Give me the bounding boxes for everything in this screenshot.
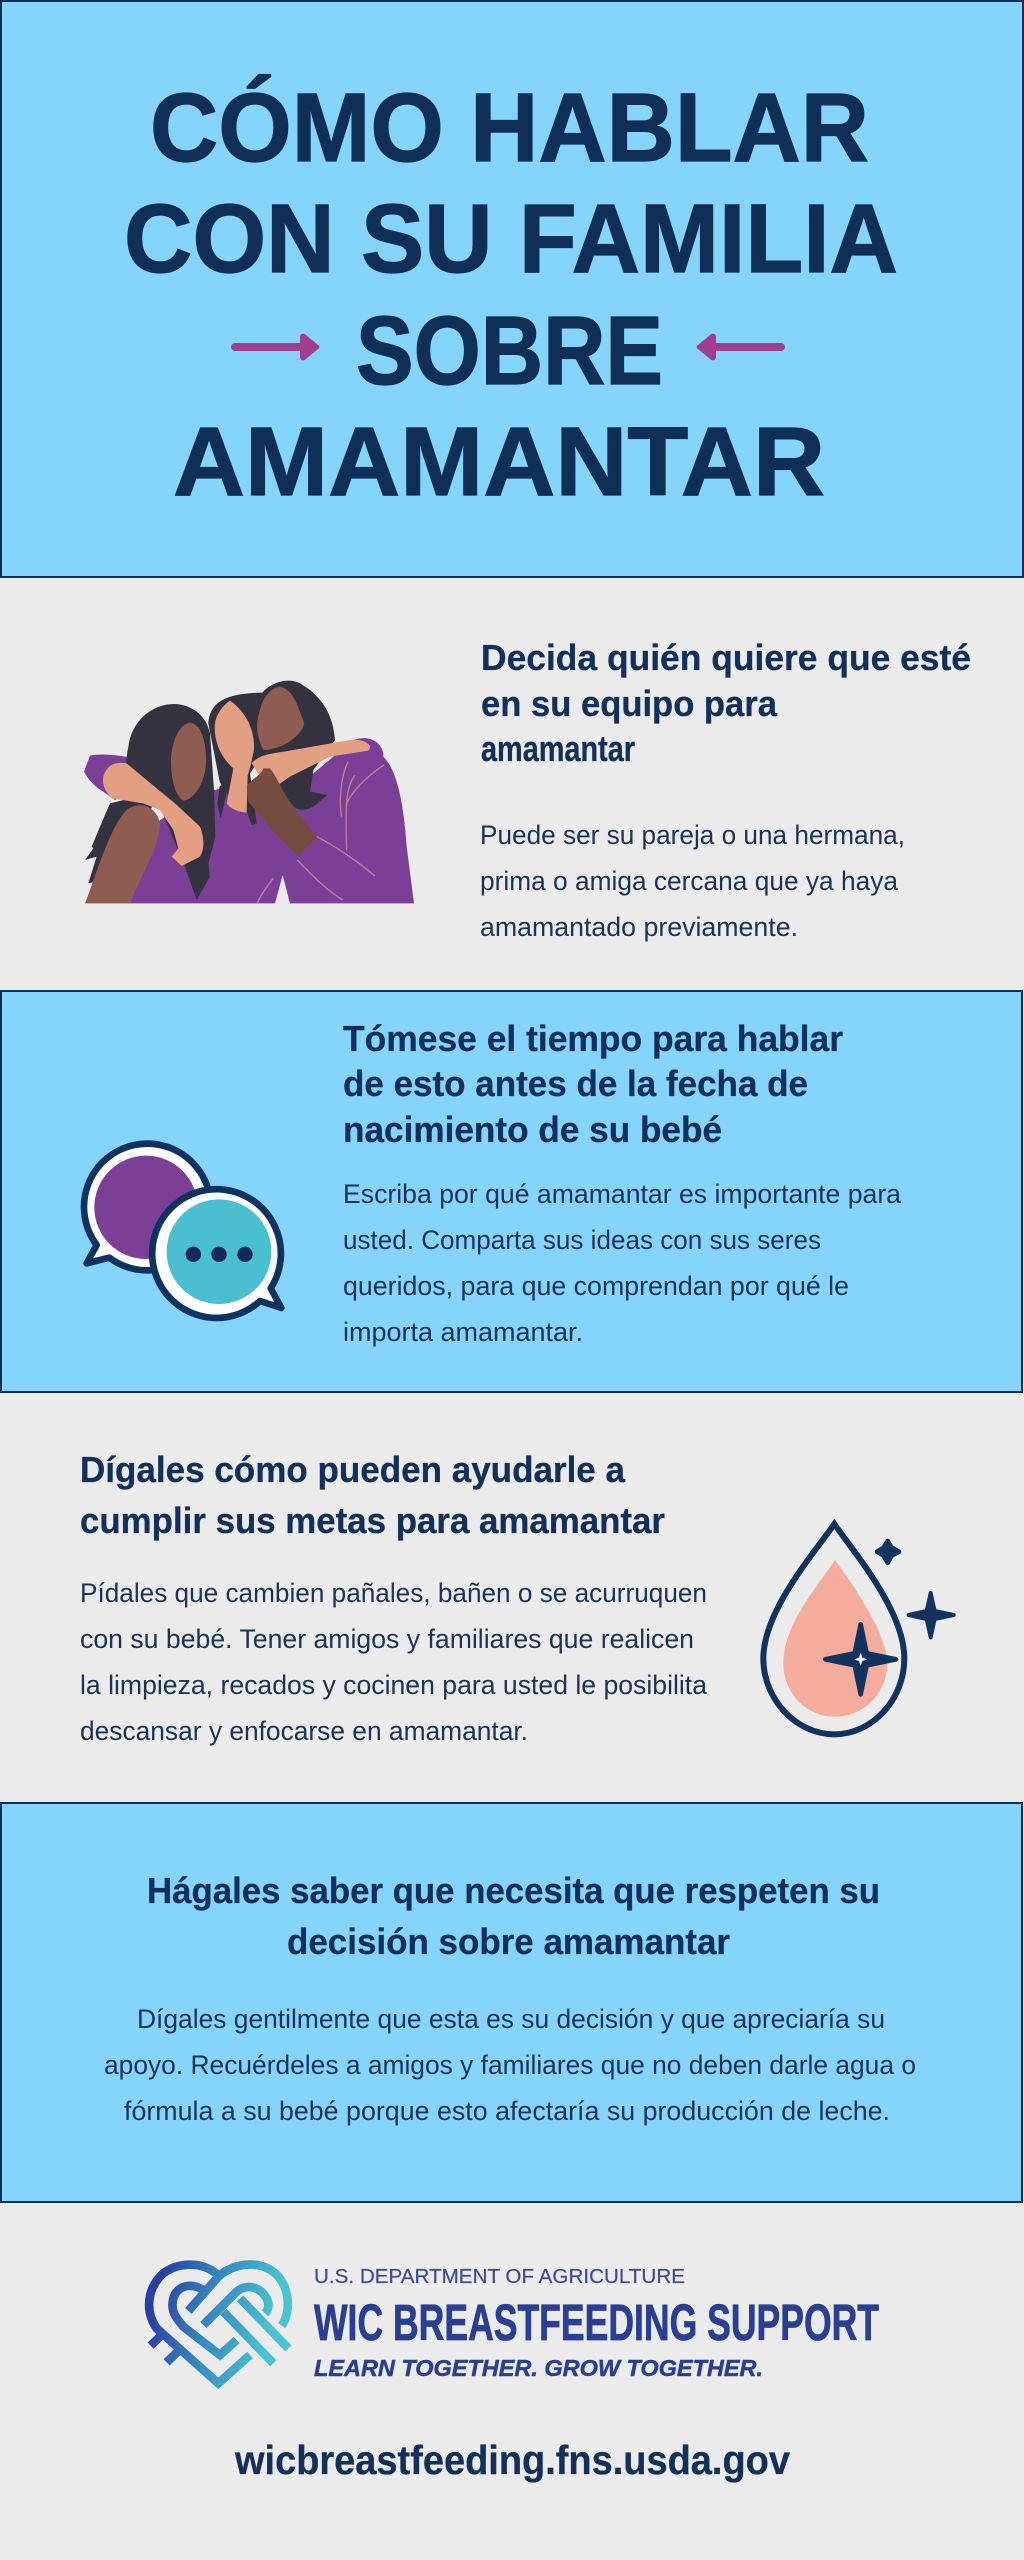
heading: en su equipo para — [481, 683, 778, 724]
panel: take the time to talk — [1, 991, 1022, 1392]
title: SOBRE — [356, 296, 663, 405]
panel: title banner — [1, 1, 1023, 577]
heading: de esto antes de la fecha de — [343, 1063, 808, 1104]
icon: WIC heart logo — [149, 2265, 288, 2383]
illustration: three women hugging — [84, 681, 414, 903]
icon: speech bubbles — [84, 1144, 281, 1318]
text block: Dígales gentilmente que esta es su decisión y que apreciaría su — [137, 2004, 885, 2034]
logo text: tagline: LEARN TOGETHER. GROW TOGETHER. — [314, 2355, 763, 2381]
panel: tell them how to help — [80, 1449, 954, 1746]
heading: Tómese el tiempo para hablar — [343, 1018, 843, 1059]
heading: decisión sobre amamantar — [287, 1921, 730, 1962]
logo text: department: U.S. DEPARTMENT OF AGRICULTURE — [314, 2266, 685, 2288]
heading — [481, 637, 971, 769]
heading — [147, 1870, 880, 1962]
text block — [80, 1578, 708, 1746]
text block: Puede ser su pareja o una hermana, — [480, 820, 905, 850]
text block: Pídales que cambien pañales, bañen o se acurruquen — [80, 1578, 707, 1608]
panel: footer — [149, 2265, 879, 2483]
text block: prima o amiga cercana que ya haya — [480, 866, 899, 896]
title: CÓMO HABLAR — [150, 73, 869, 182]
text block — [480, 820, 905, 942]
text block: fórmula a su bebé porque esto afectaría su producción de leche. — [124, 2096, 890, 2126]
text block: la limpieza, recados y cocinen para usted le posibilita — [80, 1670, 708, 1700]
panel: choose your team — [84, 637, 971, 942]
heading: Decida quién quiere que esté — [481, 637, 971, 678]
text block: apoyo. Recuérdeles a amigos y familiares que no deben darle agua o — [104, 2050, 916, 2080]
heading: Hágales saber que necesita que respeten su — [147, 1870, 880, 1911]
text block: queridos, para que comprendan por qué le — [343, 1271, 849, 1301]
heading: cumplir sus metas para amamantar — [80, 1500, 665, 1541]
text block — [104, 2004, 916, 2126]
heading — [80, 1449, 665, 1541]
title — [124, 73, 898, 516]
text block — [343, 1179, 902, 1347]
heading: amamantar — [481, 728, 635, 769]
website address: wicbreastfeeding.fns.usda.gov — [234, 2437, 790, 2483]
text block: importa amamantar. — [343, 1317, 583, 1347]
title: CON SU FAMILIA — [124, 184, 898, 293]
text block: con su bebé. Tener amigos y familiares que realicen — [80, 1624, 694, 1654]
icon: sparkling milk drop — [763, 1524, 954, 1734]
heading: nacimiento de su bebé — [343, 1109, 722, 1150]
text block: descansar y enfocarse en amamantar. — [80, 1716, 528, 1746]
title: AMAMANTAR — [173, 407, 825, 516]
text block: usted. Comparta sus ideas con sus seres — [343, 1225, 821, 1255]
text block: amamantado previamente. — [480, 912, 798, 942]
arrow: right pointing left — [696, 334, 785, 360]
panel: respect your decision — [1, 1803, 1022, 2202]
text block: Escriba por qué amamantar es importante para — [343, 1179, 902, 1209]
heading — [343, 1018, 843, 1150]
arrow: left pointing right — [231, 334, 320, 360]
heading: Dígales cómo pueden ayudarle a — [80, 1449, 626, 1490]
